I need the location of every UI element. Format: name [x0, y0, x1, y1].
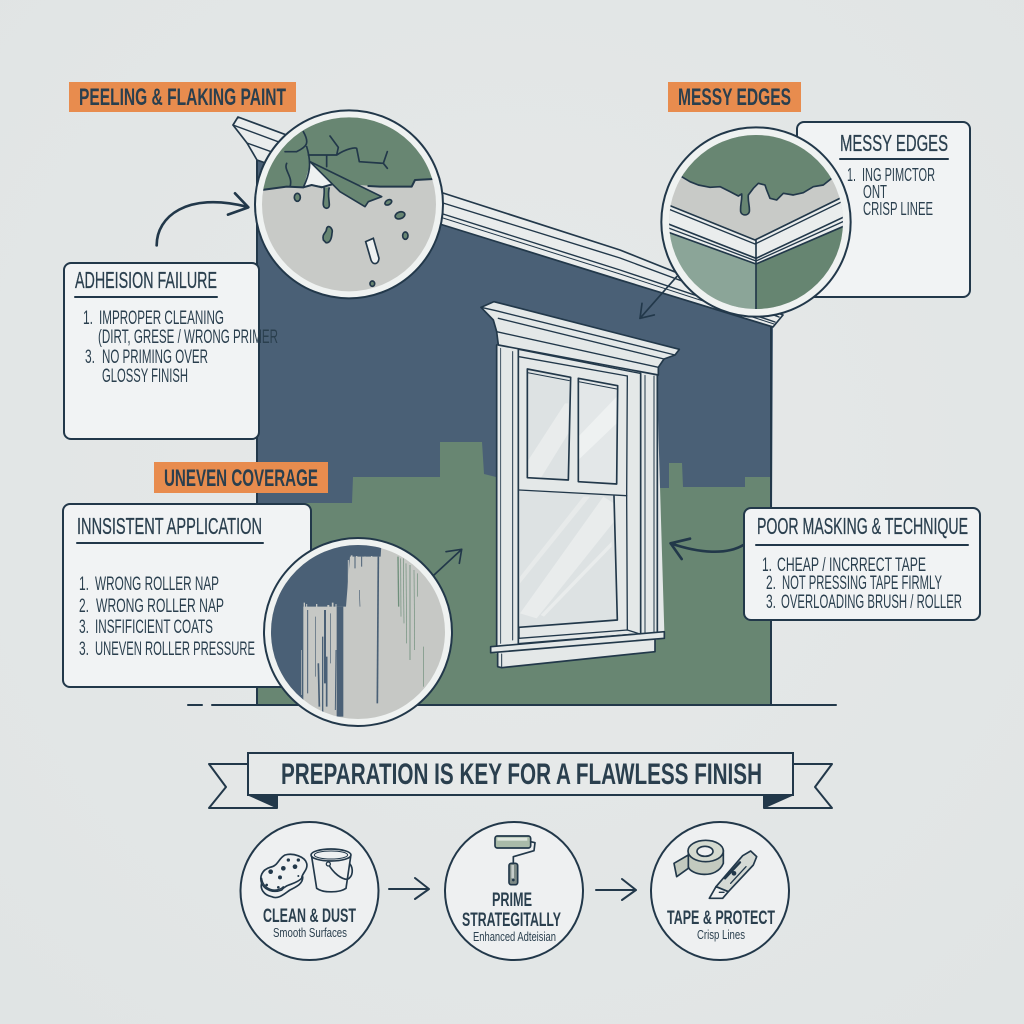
- arrow: poor masking pointer: [671, 539, 743, 559]
- arrow: messy edges pointer: [640, 277, 677, 318]
- box: inconsistent application: [63, 504, 311, 687]
- house wall: [257, 158, 773, 705]
- roof molding: [233, 117, 783, 327]
- circle: messy edges detail: [661, 127, 851, 317]
- box: inconsistent application: 1.: [79, 574, 89, 595]
- box: adhesion failure: (DIRT, GRESE / WRONG PRIMER: [98, 327, 278, 348]
- upper right pane: [578, 378, 618, 484]
- tag: peeling and flaking paint: PEELING & FLAKING PAINT: [79, 84, 286, 111]
- icon: utility knife: [709, 851, 757, 898]
- tag: uneven coverage: [154, 462, 328, 493]
- arrow: uneven coverage pointer: [434, 549, 462, 575]
- step: prime strategically: STRATEGITALLY: [462, 910, 561, 931]
- box: inconsistent application: 3.: [79, 639, 89, 660]
- lower sash glass: [519, 491, 617, 627]
- step: prime strategically: [445, 822, 583, 960]
- step: clean and dust: CLEAN & DUST: [263, 906, 356, 927]
- step: clean and dust: [240, 822, 378, 960]
- icon: tape roll: [674, 840, 723, 877]
- icon: sponge: [261, 854, 307, 898]
- tag: messy edges: [668, 82, 801, 112]
- tag: messy edges: MESSY EDGES: [678, 84, 791, 111]
- window: [481, 302, 679, 668]
- upper left pane: [527, 369, 571, 480]
- step: tape and protect: Crisp Lines: [697, 927, 745, 942]
- box: poor masking and technique: [744, 508, 980, 620]
- box: inconsistent application: INSFIFICIENT COATS: [95, 617, 213, 638]
- circle: uneven coverage detail: [264, 538, 452, 726]
- box: inconsistent application: INNSISTENT APPLICATION: [77, 513, 262, 539]
- box: adhesion failure: 1.: [83, 308, 93, 329]
- box: poor masking and technique: 2.: [766, 573, 776, 594]
- step: tape and protect: [651, 822, 789, 960]
- box: messy edges: [797, 122, 970, 297]
- circle: peeling paint detail: [253, 110, 447, 300]
- box: messy edges: CRISP LINEE: [863, 199, 933, 219]
- box: adhesion failure: NO PRIMING OVER: [102, 347, 208, 368]
- tag: uneven coverage: UNEVEN COVERAGE: [164, 465, 318, 492]
- box: adhesion failure: 3.: [85, 347, 95, 368]
- box: adhesion failure: IMPROPER CLEANING: [99, 308, 224, 329]
- box: adhesion failure: [64, 263, 278, 439]
- box: poor masking and technique: 1.: [762, 555, 772, 576]
- ground line: [188, 704, 836, 706]
- tag: peeling and flaking paint: [69, 82, 296, 112]
- step: prime strategically: PRIME: [492, 890, 532, 911]
- box: poor masking and technique: 3.: [766, 592, 776, 613]
- box: inconsistent application: 2.: [79, 596, 89, 617]
- box: messy edges: ING PIMCTOR: [862, 165, 935, 185]
- box: inconsistent application: UNEVEN ROLLER PRESSURE: [95, 639, 255, 660]
- icon: bucket: [311, 849, 352, 892]
- arrow: to peeling circle: [157, 193, 248, 245]
- arrow: step one to two: [389, 878, 429, 899]
- box: messy edges: 1.: [847, 165, 856, 185]
- step: tape and protect: TAPE & PROTECT: [667, 908, 775, 929]
- banner: preparation is key: PREPARATION IS KEY FOR A FLAWLESS FINISH: [281, 758, 762, 791]
- box: adhesion failure: ADHEISION FAILURE: [75, 267, 217, 293]
- icon: paint roller: [495, 836, 535, 885]
- box: poor masking and technique: CHEAP / INCRRECT TAPE: [777, 555, 926, 576]
- banner: preparation is key: [209, 753, 832, 808]
- box: inconsistent application: WRONG ROLLER NAP: [96, 596, 224, 617]
- box: messy edges: ONT: [863, 182, 887, 202]
- window frame lines: [481, 302, 679, 668]
- step: prime strategically: Enhanced Adteisian: [473, 929, 556, 944]
- arrow: step two to three: [596, 879, 636, 900]
- box: adhesion failure: GLOSSY FINISH: [102, 366, 188, 387]
- step: clean and dust: Smooth Surfaces: [273, 925, 347, 940]
- box: messy edges: MESSY EDGES: [840, 130, 948, 156]
- box: inconsistent application: WRONG ROLLER NAP: [95, 574, 219, 595]
- box: inconsistent application: 3.: [79, 617, 89, 638]
